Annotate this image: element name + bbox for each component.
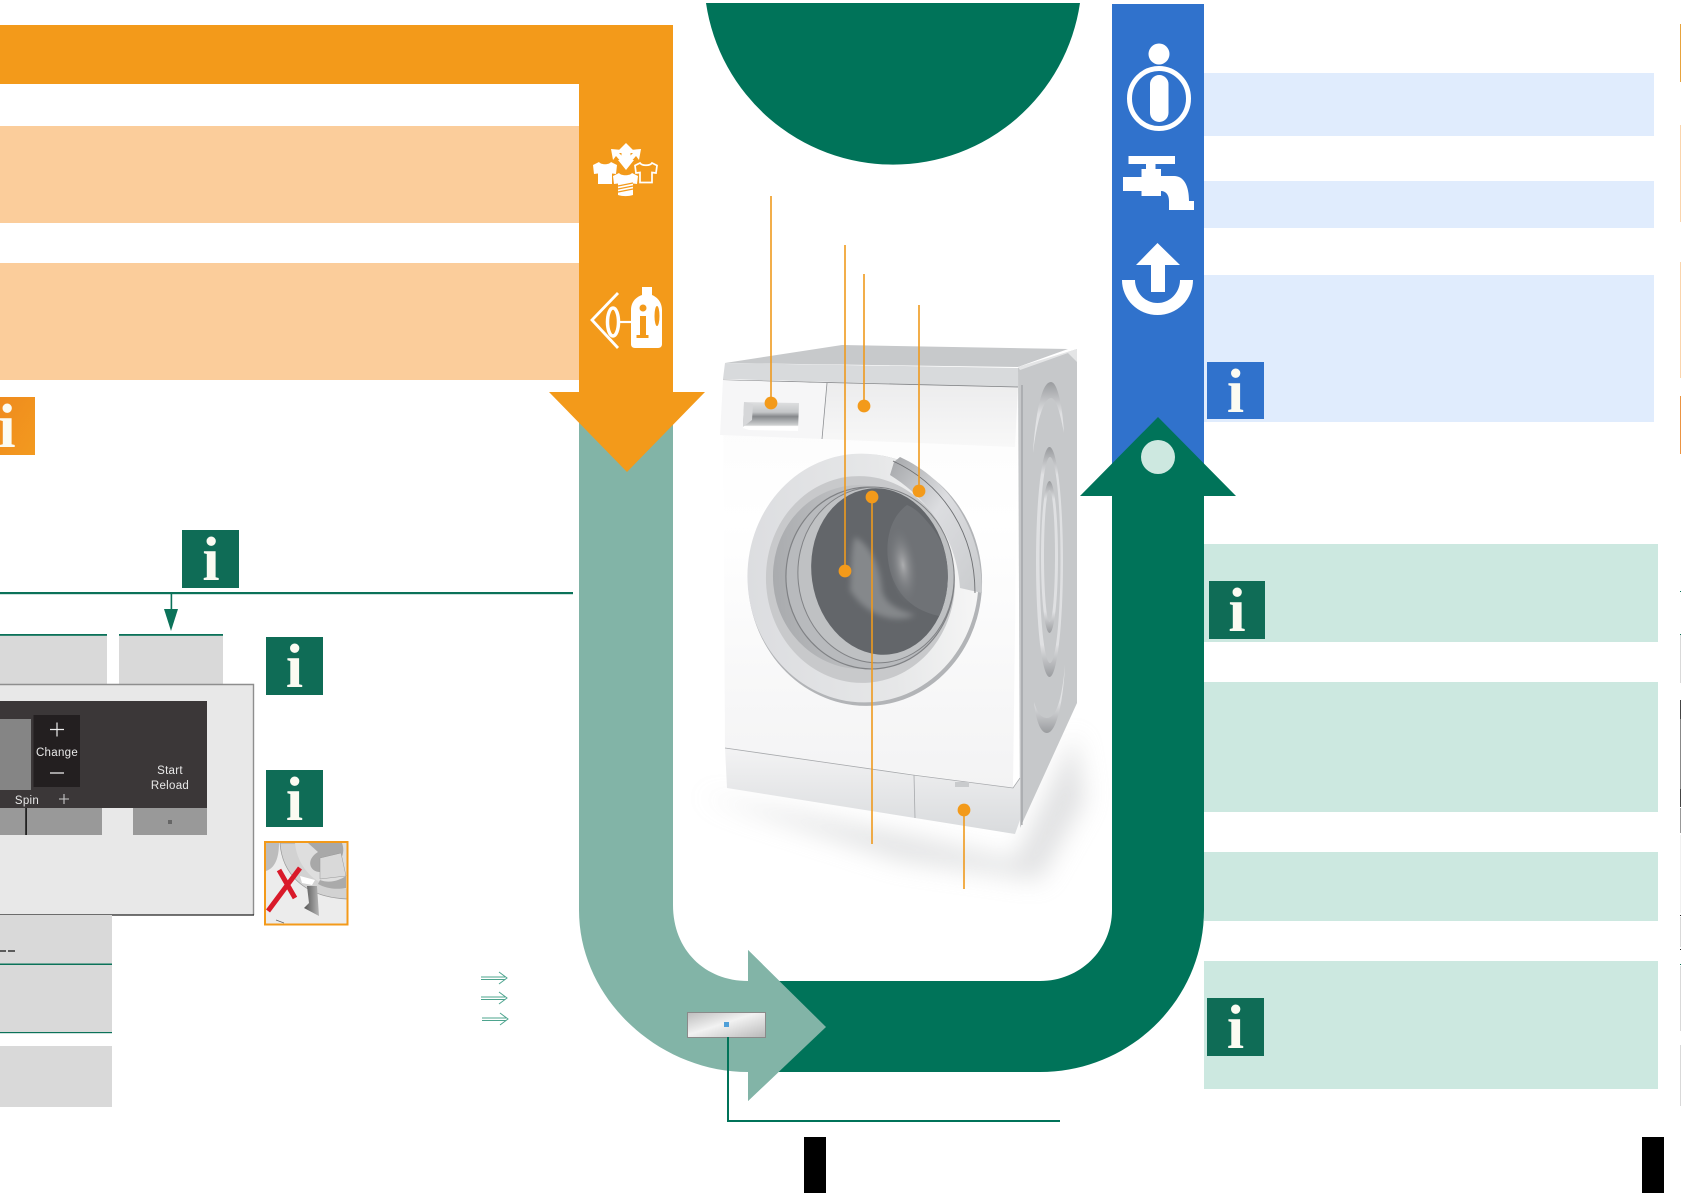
icon: water tap (1123, 156, 1194, 210)
icon: green info box note two: i (286, 766, 303, 834)
icon: water inlet arrow (1122, 243, 1193, 315)
arrow: orange preparation flow (0, 25, 705, 472)
icon: read detergent label (592, 287, 662, 348)
icon: blue info box: i (1227, 358, 1244, 426)
icon: green info box note one: i (286, 633, 303, 701)
icon: orange info box (0, 393, 35, 461)
icon: green info box heading: i (202, 526, 220, 594)
illustration: washing machine (700, 196, 1085, 889)
page tab left (804, 1137, 826, 1193)
arrows: result pointers (481, 972, 508, 1025)
panel: peach preparation step one (0, 126, 579, 223)
divider with down arrow (0, 592, 573, 631)
display fascia: Spin (15, 795, 39, 807)
arrow head: light teal over dark band (748, 950, 826, 1101)
connector line from start button (728, 1037, 1060, 1121)
panel: peach preparation step two (0, 263, 579, 380)
door inner ring (757, 468, 964, 691)
arrow: dark green flow (770, 417, 1236, 1072)
arrow: light teal curved wash flow (579, 392, 826, 1101)
panel: green info one (1204, 544, 1658, 642)
icon: green info box one: i (1228, 577, 1246, 645)
display fascia: Start (157, 765, 183, 777)
panel: green info three (1204, 852, 1658, 921)
icon: green info box four: i (1227, 994, 1244, 1062)
top surface (725, 345, 1068, 367)
panel: grey control heading left (0, 634, 107, 686)
side panel (1018, 349, 1077, 828)
icon: blue info box (1207, 358, 1264, 426)
icon: information circle (1130, 44, 1188, 128)
callout lines and dots (765, 196, 970, 889)
icon: green info box one (1209, 577, 1265, 645)
base plinth (725, 748, 1020, 834)
door ring (737, 444, 993, 716)
panel: grey settings row bottom (0, 1046, 112, 1107)
display fascia: Change (36, 747, 78, 759)
panel: blue info two (1204, 181, 1654, 228)
top strip (723, 363, 1018, 387)
step marker circle (1141, 440, 1175, 474)
panel: blue column (1112, 4, 1204, 504)
panel: grey control heading right (119, 634, 223, 686)
heading shape: green semicircle (706, 3, 1080, 165)
door glass (811, 488, 948, 655)
panel: grey settings row (0, 965, 112, 1033)
panel: green info four (1204, 961, 1658, 1089)
icon: green info box four (1207, 994, 1264, 1062)
panel: blue info three (1204, 275, 1654, 422)
page tab right (1642, 1137, 1664, 1193)
icon: sort laundry (593, 143, 657, 196)
cabinet front (723, 380, 1018, 788)
display fascia: Reload (151, 780, 189, 792)
icon: green info box note one (266, 633, 323, 701)
floor shadow (700, 735, 1085, 880)
icon: green info box note two (266, 766, 323, 834)
door handle (890, 457, 982, 593)
display fascia (0, 701, 207, 808)
next page edge slivers (1680, 24, 1681, 1106)
icon: green info box heading (182, 526, 239, 594)
touch buttons (0, 808, 207, 835)
panel: grey settings row with dashes (0, 915, 112, 966)
start button graphic (688, 1012, 766, 1038)
dispenser and programmer panel (720, 380, 827, 439)
panel: green info two (1204, 682, 1658, 812)
illustration: do not trap laundry in door (265, 842, 348, 924)
panel: blue info one (1204, 73, 1654, 136)
panel: control console (0, 684, 254, 915)
